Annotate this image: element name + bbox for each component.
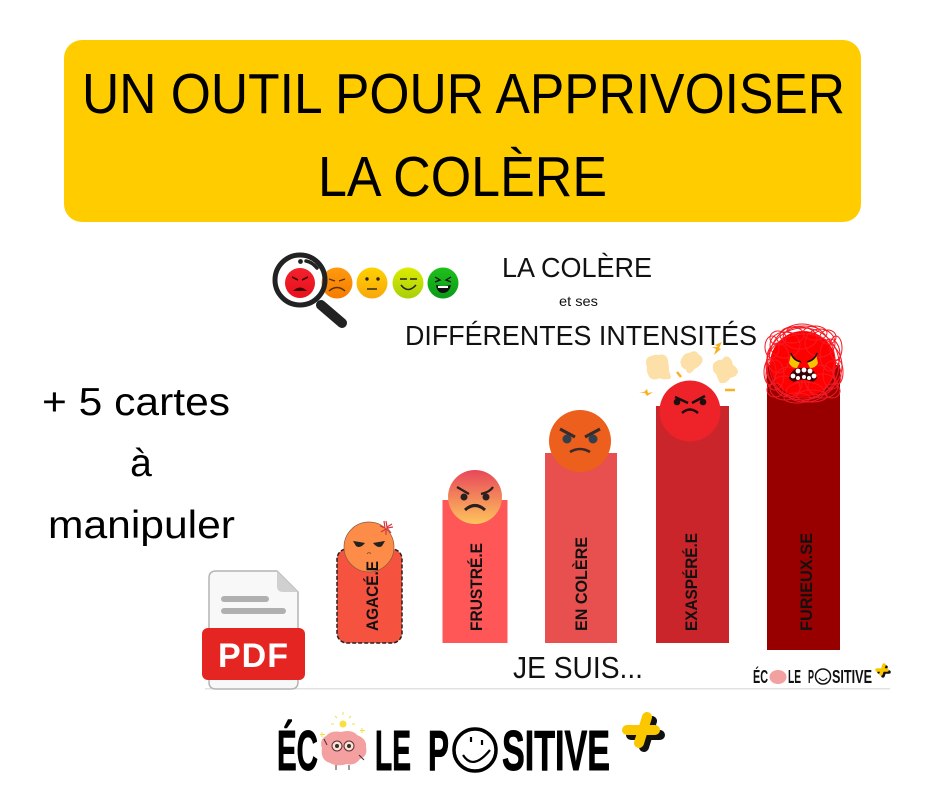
icon: frustrated face [448, 470, 502, 524]
icon: smiley [454, 729, 496, 771]
icon: pdf document: PDF [218, 637, 288, 675]
baseline rule [205, 688, 890, 690]
small logo: école positive [753, 665, 889, 687]
bar: frustré.e [442, 470, 508, 643]
bar: agacé.e: AGACÉ.E [363, 561, 382, 631]
text: + 5 cartes à manipuler: à [130, 442, 152, 485]
text: je suis...: JE SUIS... [513, 650, 643, 685]
icon: angry face [549, 410, 611, 472]
text: + 5 cartes à manipuler [42, 381, 235, 547]
icon: annoyed face [344, 521, 394, 572]
title banner: UN OUTIL POUR APPRIVOISER [82, 62, 845, 126]
logo: école positive: ÉC [277, 719, 318, 783]
small logo: école positive: ÉC [753, 666, 768, 687]
bar: exaspéré.e [639, 342, 736, 643]
icon: pdf document [202, 571, 305, 689]
icon: emotion faces under magnifying glass [275, 255, 458, 323]
heading: la colère et ses différentes intensités [405, 252, 757, 351]
bar: furieux.se: FURIEUX.SE [797, 533, 816, 631]
text: + 5 cartes à manipuler: + 5 cartes [42, 381, 230, 424]
icon: furious scribble face [764, 324, 843, 403]
logo: école positive: SITIVE [502, 719, 610, 783]
bar: en colère [545, 410, 617, 643]
small logo: école positive: LE [788, 667, 801, 687]
bar: frustré.e: FRUSTRÉ.E [467, 543, 486, 631]
title banner: LA COLÈRE [318, 145, 607, 209]
logo: école positive: LE [375, 719, 411, 783]
bar: agacé.e [337, 521, 402, 643]
heading: la colère et ses différentes intensités: et ses [559, 293, 598, 309]
small logo: école positive: P [808, 667, 814, 687]
bar: furieux.se [764, 324, 843, 650]
icon: brain mascot [320, 712, 366, 770]
logo: école positive [277, 712, 660, 783]
heading: la colère et ses différentes intensités: DIFFÉRENTES INTENSITÉS [405, 320, 757, 351]
icon: yellow plus [627, 717, 660, 747]
icon: exasperated face with steam [639, 342, 736, 442]
title banner [64, 40, 861, 222]
heading: la colère et ses différentes intensités: LA COLÈRE [502, 252, 652, 283]
bar: en colère: EN COLÈRE [572, 537, 591, 631]
logo: école positive: P [428, 719, 449, 783]
small logo: école positive: SITIVE [832, 667, 872, 687]
text: + 5 cartes à manipuler: manipuler [48, 504, 235, 547]
bar: exaspéré.e: EXASPÉRÉ.E [682, 533, 701, 631]
